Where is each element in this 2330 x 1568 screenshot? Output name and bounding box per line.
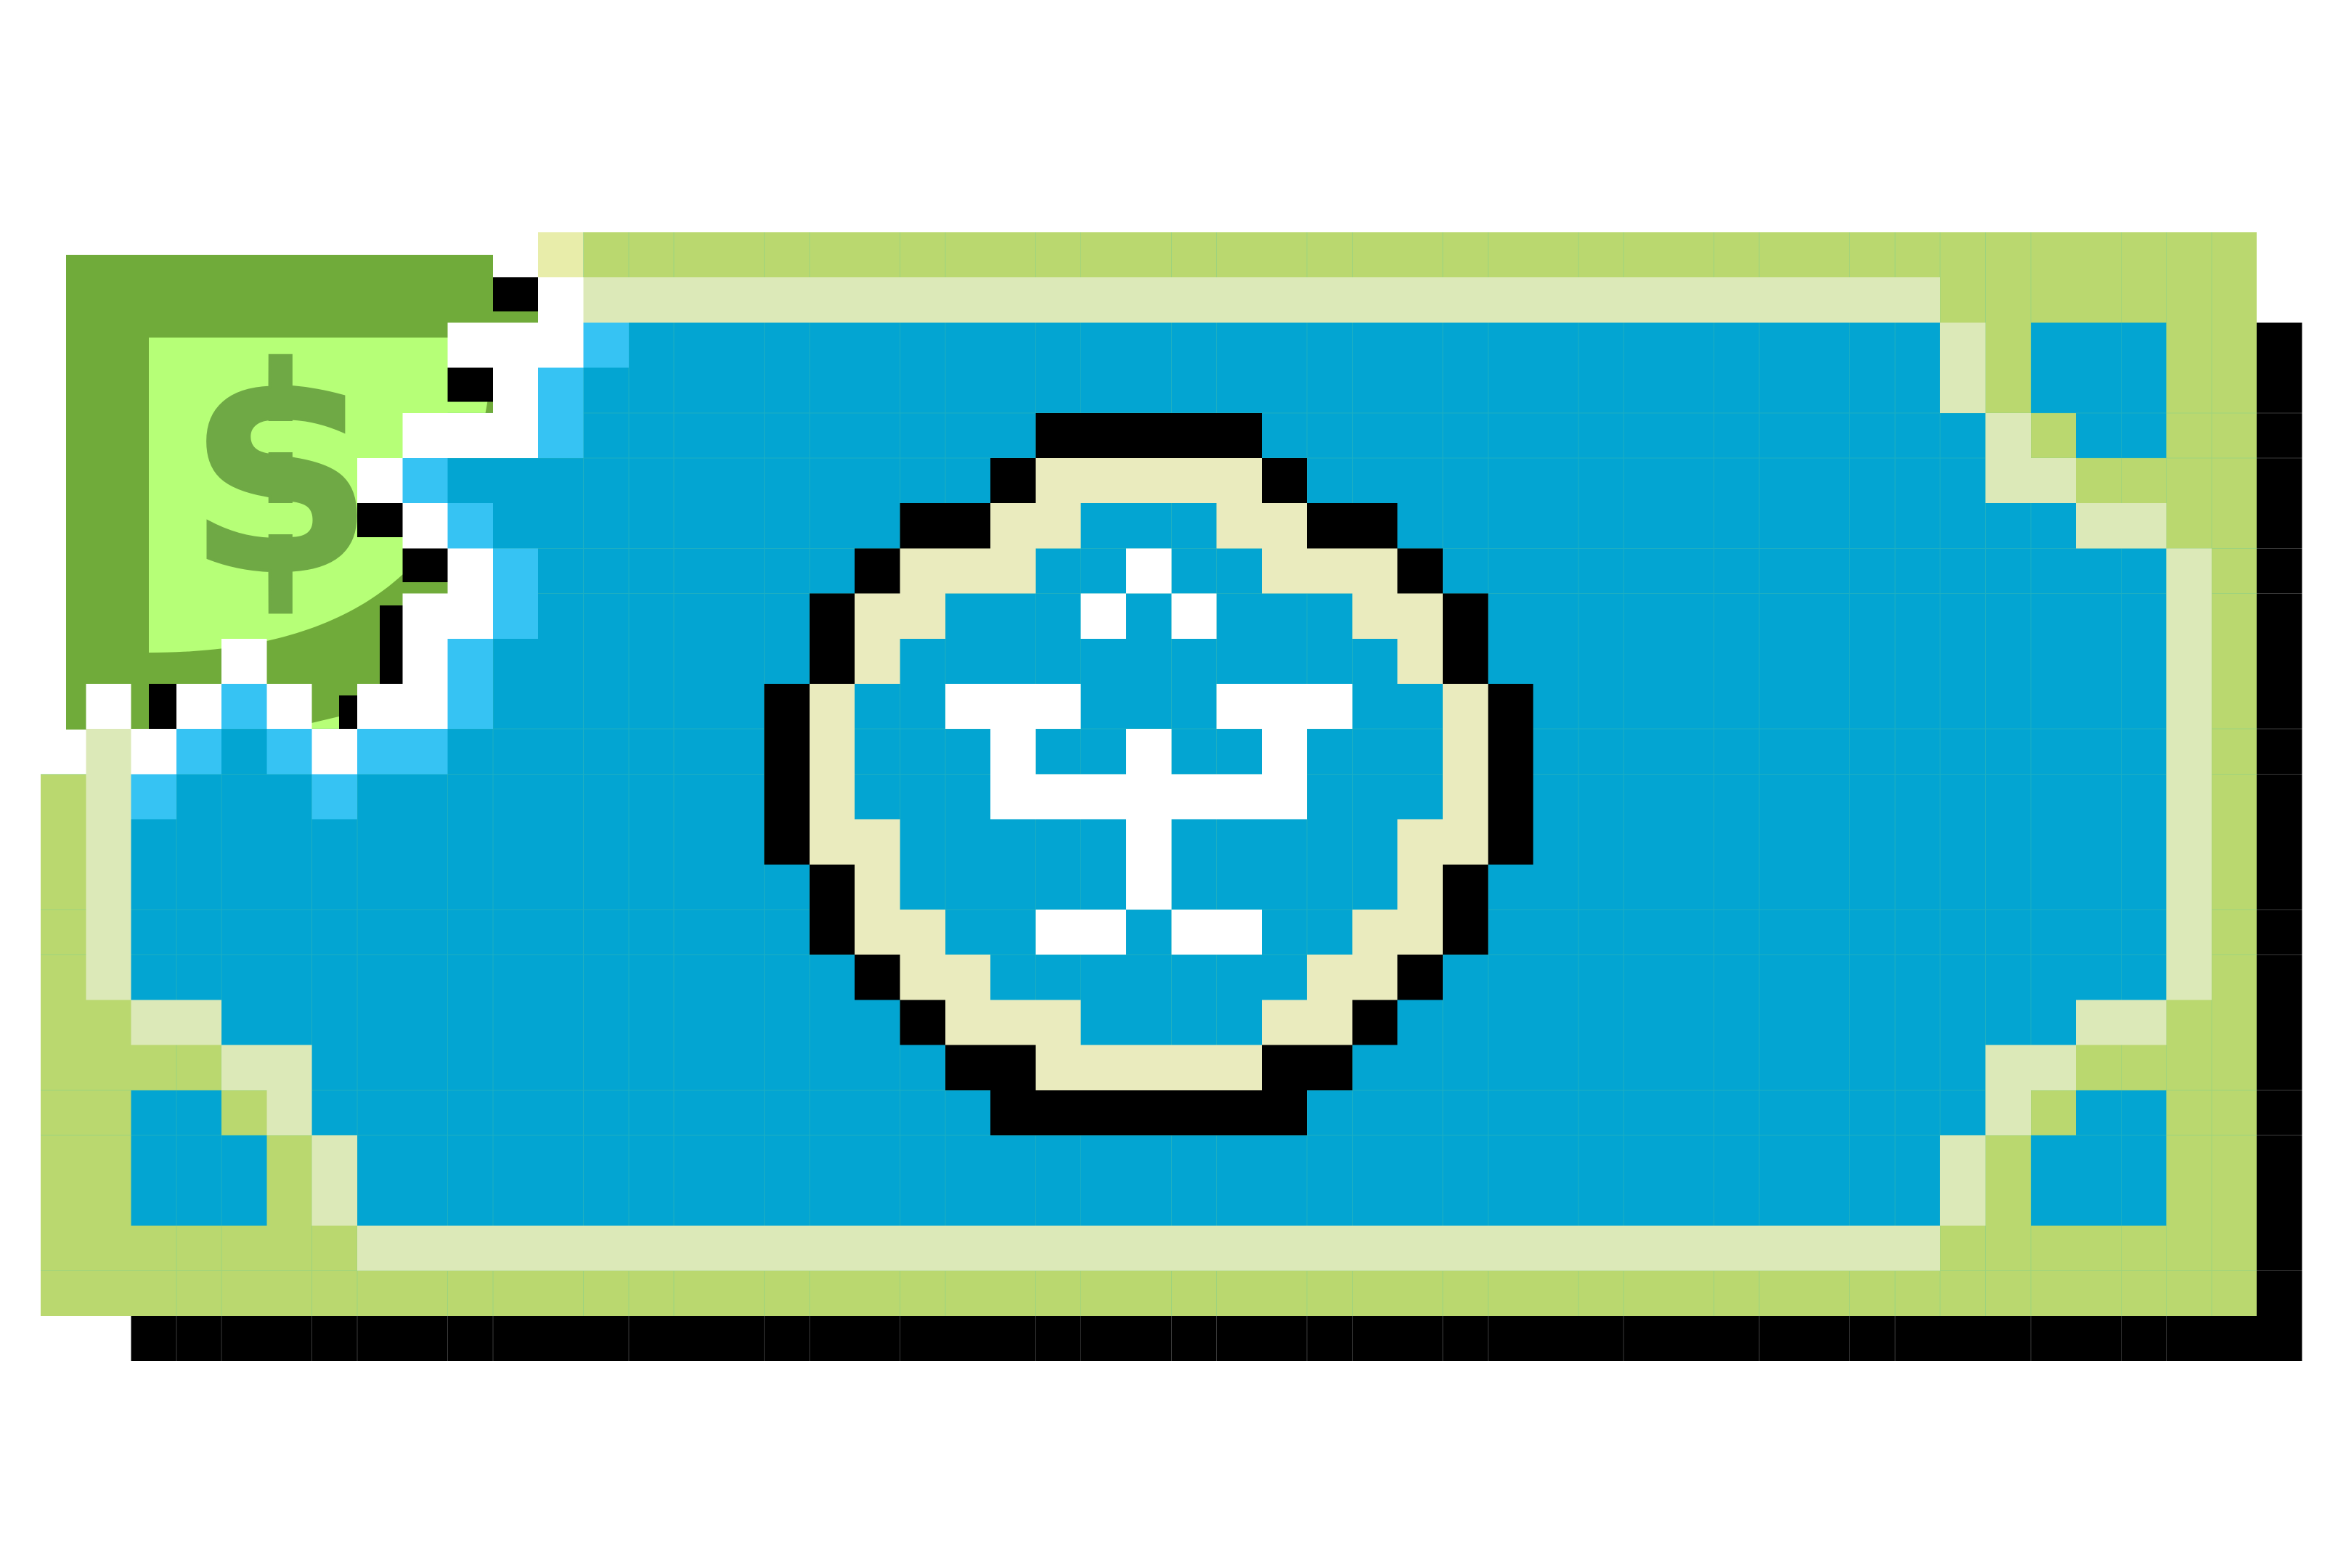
center emblem: circle with pictogram — [765, 413, 1533, 1135]
note light green panel — [149, 338, 492, 653]
faint pixel seams — [41, 232, 2257, 1316]
torn edge black pixels — [149, 277, 538, 729]
emblem white pictogram — [945, 548, 1352, 955]
top left yellow corner pixel — [538, 232, 583, 277]
pixel grid artwork — [41, 232, 2302, 1361]
torn edge white pixels — [86, 277, 583, 774]
background note: green bill with dollar sign — [66, 255, 538, 730]
pale inner frame — [86, 277, 2212, 1271]
emblem cream ring — [810, 458, 1488, 1090]
emblem black ring — [765, 413, 1533, 1135]
icon: dollar sign: $ — [187, 308, 374, 637]
bill blue field — [131, 322, 2167, 1225]
note green backing — [66, 255, 538, 730]
drop shadow of bill — [131, 322, 2302, 1361]
bill lime border — [41, 232, 2257, 1316]
note light green sliver — [311, 716, 339, 730]
torn edge cyan highlight — [131, 322, 629, 820]
